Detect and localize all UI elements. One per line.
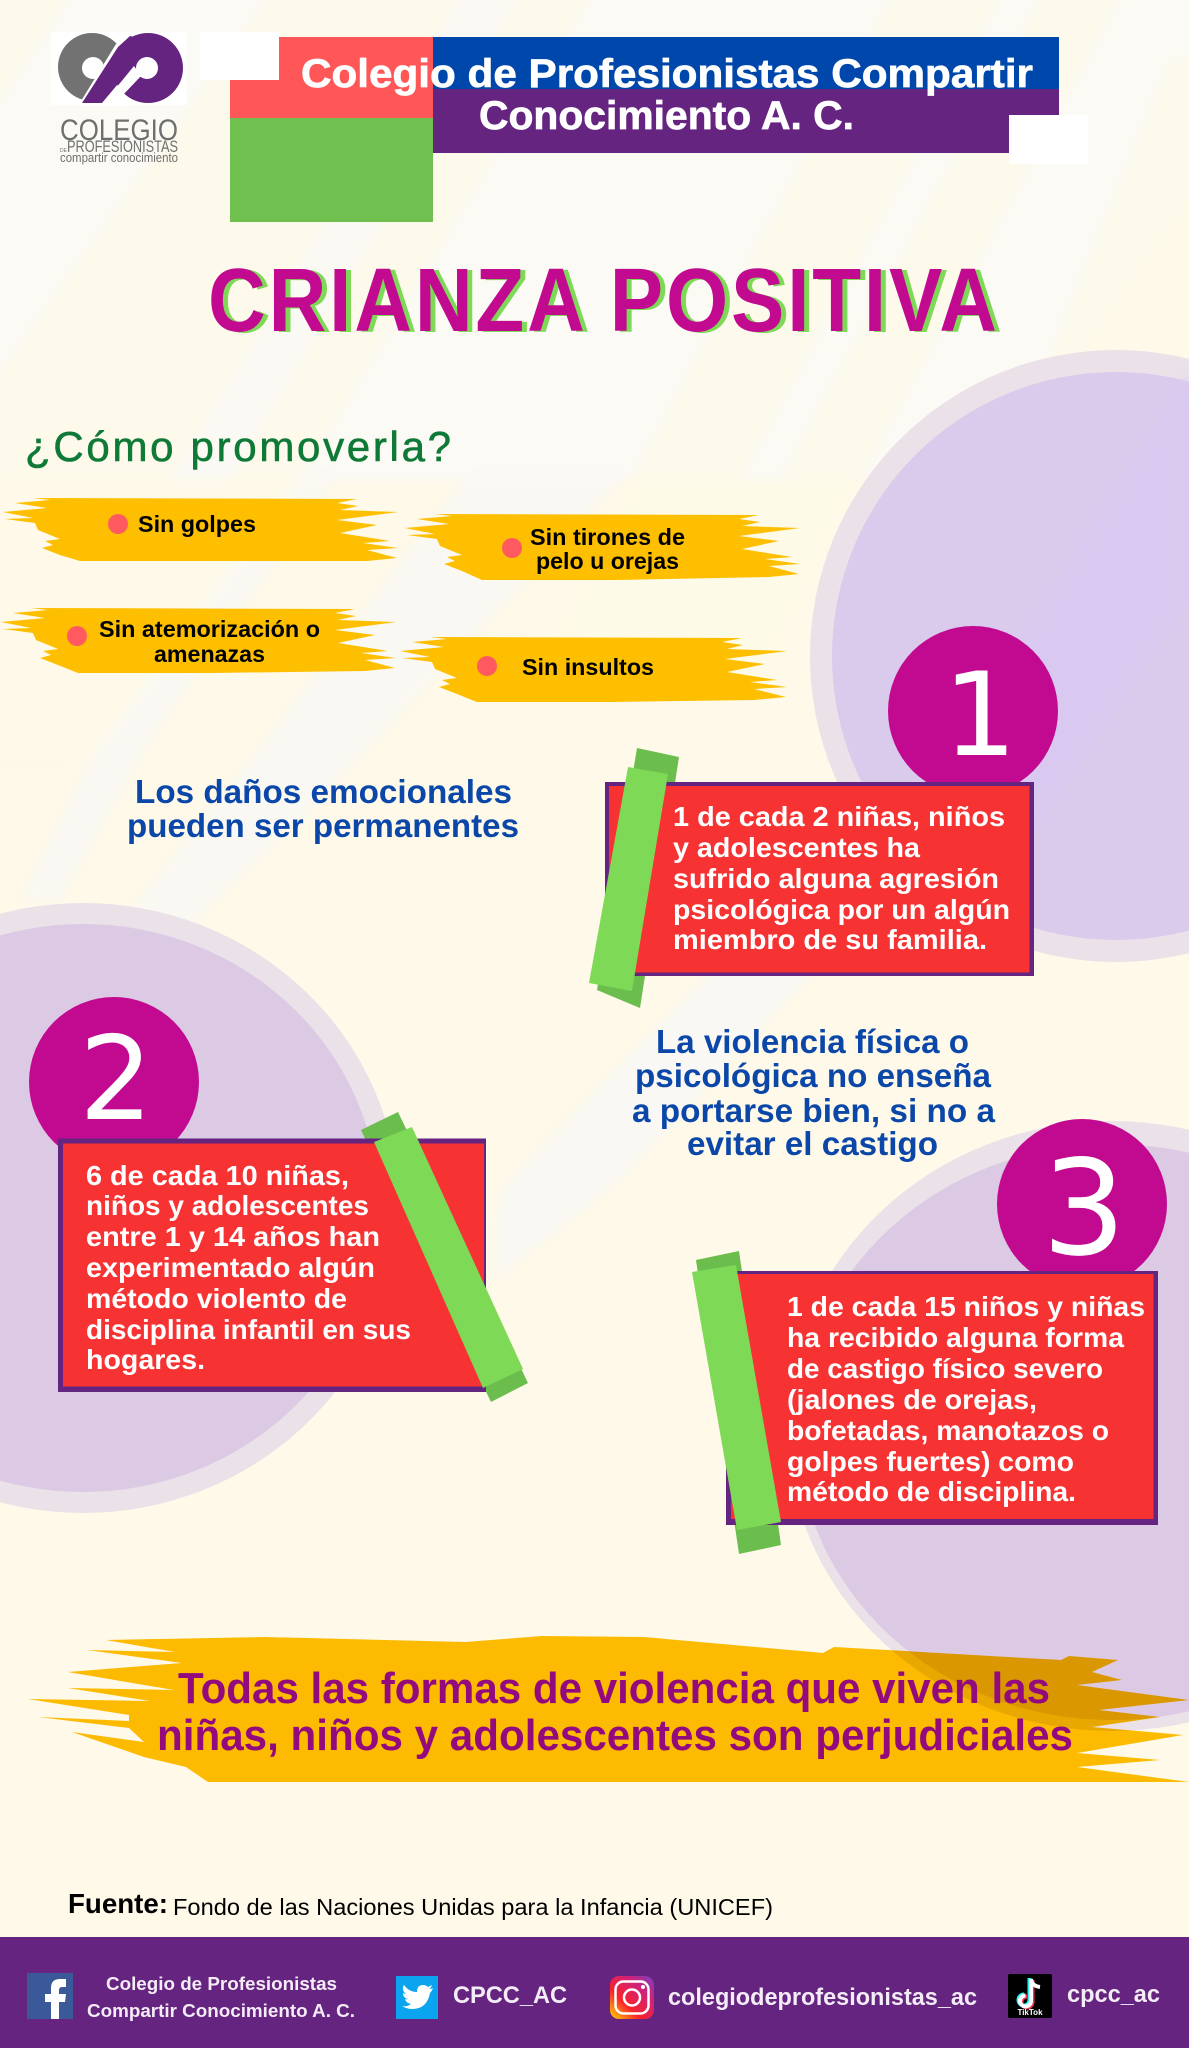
item: sin golpes: Sin golpes — [138, 511, 256, 537]
callout: violencia — [632, 1023, 996, 1162]
icon: instagram — [610, 1976, 654, 2019]
logo: PROFESIONISTAS — [67, 137, 178, 156]
callout: daños emocionales: Los daños emocionales — [135, 773, 512, 810]
source: Fuente: — [68, 1888, 168, 1919]
icon: tiktok — [1008, 1974, 1052, 2018]
decorative circle left — [0, 903, 399, 1513]
panel: stat 3: golpes fuertes) como — [787, 1446, 1074, 1477]
panel: stat 3: ha recibido alguna forma — [787, 1322, 1124, 1353]
panel: stat 2: método violento de — [86, 1283, 347, 1314]
number circle 2 — [29, 997, 199, 1167]
panel: stat 1: y adolescentes ha — [673, 832, 920, 863]
logo: DE — [60, 148, 68, 154]
item: sin atemorizacion — [1, 608, 396, 673]
tape 2 front — [374, 1127, 523, 1388]
item: sin atemorizacion: Sin atemorización o — [99, 616, 320, 642]
item: sin insultos: Sin insultos — [522, 654, 654, 680]
decorative circle right top — [810, 350, 1189, 962]
callout: daños emocionales — [127, 773, 519, 844]
conclusion banner — [28, 1636, 1189, 1782]
footer org name: Compartir Conocimiento A. C. — [87, 2001, 355, 2021]
panel: stat 2: niños y adolescentes — [86, 1190, 369, 1221]
panel: stat 3: (jalones de orejas, — [787, 1384, 1037, 1415]
header title text — [301, 52, 1033, 138]
number circle 1: 1 — [943, 648, 1017, 783]
panel: stat 1: psicológica por un algún — [673, 894, 1010, 925]
icon: facebook — [27, 1973, 73, 2019]
panel: stat 3: bofetadas, manotazos o — [787, 1415, 1109, 1446]
item: sin tirones — [405, 514, 800, 580]
instagram handle: colegiodeprofesionistas_ac — [668, 1984, 977, 2011]
tape 3 back — [696, 1251, 781, 1554]
tape 3 front — [692, 1265, 781, 1530]
number circle 3 — [997, 1119, 1167, 1289]
footer org name: Colegio de Profesionistas — [106, 1974, 337, 1994]
panel: stat 2 — [58, 1112, 528, 1402]
callout: violencia: La violencia física o — [656, 1023, 969, 1060]
tiktok handle: cpcc_ac — [1067, 1981, 1160, 2008]
callout: daños emocionales: pueden ser permanentes — [127, 807, 519, 844]
footer — [0, 1937, 1189, 2048]
icon: twitter — [396, 1976, 438, 2019]
source — [68, 1888, 773, 1920]
footer org name — [87, 1974, 355, 2021]
item: sin tirones: pelo u orejas — [536, 548, 679, 574]
item: sin insultos — [400, 637, 787, 702]
twitter handle: CPCC_AC — [453, 1982, 567, 2009]
logo: compartir conocimiento — [60, 151, 178, 165]
header banner — [200, 32, 1088, 222]
panel: stat 2: entre 1 y 14 años han — [86, 1221, 380, 1252]
header title text: Conocimiento A. C. — [479, 94, 854, 138]
header title text: Colegio de Profesionistas Compartir — [301, 52, 1033, 96]
panel: stat 1 — [589, 748, 1034, 1008]
conclusion banner: Todas las formas de violencia que viven las — [178, 1664, 1050, 1713]
panel: stat 1: 1 de cada 2 niñas, niños — [673, 801, 1005, 832]
tape 2 back — [361, 1112, 528, 1402]
number circle 3: 3 — [1042, 1132, 1126, 1286]
item: sin golpes — [3, 498, 398, 561]
item: sin atemorizacion: amenazas — [154, 641, 265, 667]
logo — [51, 32, 187, 165]
source: Fondo de las Naciones Unidas para la Infancia (UNICEF) — [173, 1894, 773, 1920]
panel: stat 3 — [692, 1251, 1158, 1554]
conclusion banner: niñas, niños y adolescentes son perjudiciales — [157, 1711, 1073, 1760]
panel: stat 2: disciplina infantil en sus — [86, 1314, 411, 1345]
panel: stat 2: 6 de cada 10 niñas, — [86, 1160, 349, 1191]
tape 1 front — [589, 767, 668, 991]
panel: stat 1: miembro de su familia. — [673, 924, 987, 955]
callout: violencia: evitar el castigo — [687, 1125, 938, 1162]
callout: violencia: psicológica no enseña — [635, 1057, 992, 1094]
panel: stat 3: de castigo físico severo — [787, 1353, 1103, 1384]
item: sin tirones: Sin tirones de — [530, 524, 685, 550]
decorative circle right bottom — [787, 1121, 1189, 1731]
subheading: ¿Cómo promoverla? — [25, 423, 451, 470]
tape 1 back — [597, 748, 679, 1008]
panel: stat 3: método de disciplina. — [787, 1476, 1076, 1507]
number circle 1 — [888, 626, 1058, 796]
callout: violencia: a portarse bien, si no a — [632, 1092, 996, 1129]
panel: stat 3: 1 de cada 15 niños y niñas — [787, 1291, 1145, 1322]
title: CRIANZA POSITIVA — [208, 250, 997, 350]
logo: COLEGIO — [60, 114, 178, 147]
title: CRIANZA POSITIVA — [213, 251, 1002, 351]
panel: stat 2: experimentado algún — [86, 1252, 375, 1283]
icon: tiktok: TikTok — [1017, 2008, 1043, 2017]
number circle 2: 2 — [79, 1012, 153, 1147]
panel: stat 1: sufrido alguna agresión — [673, 863, 999, 894]
panel: stat 2: hogares. — [86, 1344, 205, 1375]
